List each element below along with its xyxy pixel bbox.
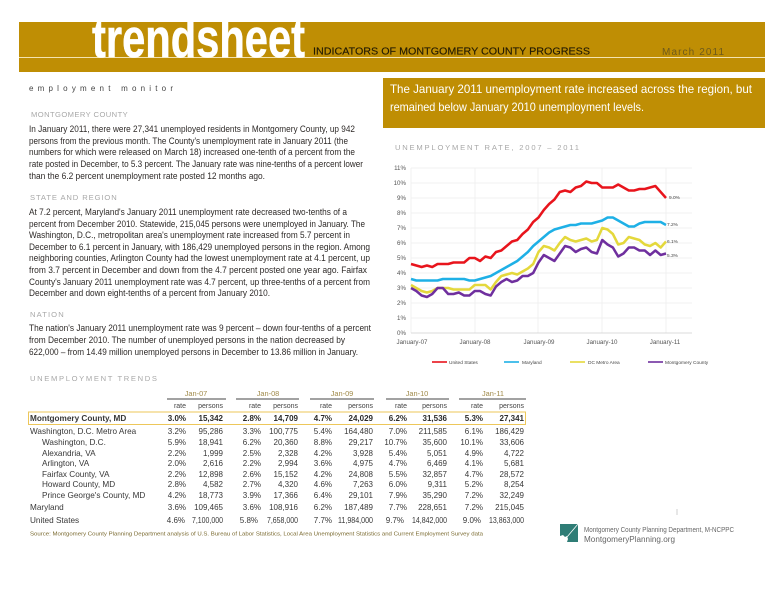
row: Fairfax: 15,152 bbox=[274, 470, 299, 479]
row: Arlington: 5,681 bbox=[504, 459, 525, 468]
row: Fairfax: 5.5% bbox=[389, 470, 407, 479]
row: Maryland: 228,651 bbox=[418, 503, 448, 512]
paragraph: State and Region: from 3.7 percent in December and down from the 4.7 percent posted one year ago. Fairfax bbox=[29, 265, 367, 276]
row: Fairfax: 12,898 bbox=[199, 470, 224, 479]
end value labels: 6.1% bbox=[667, 239, 679, 245]
series: DC Metro Area bbox=[411, 228, 666, 292]
highlighted row: Montgomery County: 27,341 bbox=[500, 414, 525, 423]
row: Arlington: Arlington, VA bbox=[42, 459, 90, 468]
x axis labels: January-08 bbox=[460, 339, 491, 346]
row: Prince George's: 29,101 bbox=[349, 491, 374, 500]
table column headers: rate bbox=[471, 403, 483, 410]
row: Washington metro bbox=[30, 427, 525, 436]
x axis labels: January-10 bbox=[587, 339, 618, 346]
row: United States: United States bbox=[30, 516, 79, 525]
source note: Source: Montgomery County Planning Department analysis of U.S. Bureau of Labor Statistics, Local Area Unemployment Statistics and Current Employment Survey data bbox=[30, 532, 484, 538]
row: Alexandria: 5,051 bbox=[427, 449, 448, 458]
end value labels: 9.0% bbox=[669, 195, 681, 201]
row: Howard: 4.6% bbox=[314, 480, 332, 489]
row: Arlington: 2,994 bbox=[278, 459, 299, 468]
row: United States: 14,842,000 bbox=[412, 516, 447, 525]
row: Maryland: 6.2% bbox=[314, 503, 332, 512]
row: Washington metro: 100,775 bbox=[269, 427, 299, 436]
row: Fairfax: 2.2% bbox=[168, 470, 186, 479]
row: Alexandria: 4.2% bbox=[314, 449, 332, 458]
row: Arlington: 4.1% bbox=[465, 459, 483, 468]
y axis labels: 6% bbox=[397, 240, 406, 247]
row: Washington metro: Washington, D.C. Metro Area bbox=[30, 427, 137, 436]
row: Washington metro: 3.2% bbox=[168, 427, 186, 436]
chart legend: DC Metro Area bbox=[588, 360, 620, 366]
row: Prince George's: 3.9% bbox=[243, 491, 261, 500]
row: Washington metro: 211,585 bbox=[419, 427, 448, 436]
row: Prince George's: 7.9% bbox=[389, 491, 407, 500]
y axis labels: 7% bbox=[397, 225, 406, 232]
paragraph: Nation: 622,000 – from 14.49 million unemployed persons in December to 13.86 million in January. bbox=[29, 347, 358, 358]
row: Fairfax: Fairfax County, VA bbox=[42, 470, 110, 479]
end value labels bbox=[667, 195, 681, 259]
paragraph: Montgomery County: numbers for which were released on March 18) increased one-tenth of a percent from the bbox=[29, 147, 355, 158]
table column headers bbox=[167, 389, 526, 410]
row: United States: 13,863,000 bbox=[489, 516, 524, 525]
text block: Nation bbox=[29, 310, 371, 358]
row: Fairfax: 2.6% bbox=[243, 470, 261, 479]
paragraph: Nation bbox=[29, 323, 371, 358]
row: Alexandria: 2.5% bbox=[243, 449, 261, 458]
paragraph: State and Region: Washington, D.C., metropolitan area's unemployment rate increased from 5.7 percent in bbox=[29, 230, 350, 241]
row: Fairfax: 24,808 bbox=[349, 470, 374, 479]
row: Arlington: 2.2% bbox=[243, 459, 261, 468]
highlighted row: Montgomery County: 5.3% bbox=[465, 414, 483, 423]
paragraph: State and Region: neighboring counties, Arlington County had the lowest unemployment rate at 4.1 percent, up bbox=[29, 253, 370, 264]
row: Howard bbox=[42, 480, 525, 489]
x axis labels bbox=[397, 339, 681, 346]
row: Alexandria bbox=[42, 449, 525, 458]
row: Washington metro: 3.3% bbox=[243, 427, 261, 436]
department name: Montgomery County Planning Department, M-NCPPC bbox=[584, 525, 735, 534]
row: Maryland: 3.6% bbox=[168, 503, 186, 512]
row: Prince George's: 35,290 bbox=[423, 491, 448, 500]
table column headers: Jan-10 bbox=[406, 389, 428, 398]
heading: Nation: NATION bbox=[30, 310, 65, 319]
paragraph: State and Region: percent from December 2010. Statewide, 215,045 persons were unemployed in January. The bbox=[29, 219, 365, 230]
callout: The January 2011 unemployment rate increased across the region, but bbox=[390, 82, 753, 96]
end value labels: 7.2% bbox=[667, 222, 679, 228]
y axis labels: 3% bbox=[397, 285, 406, 292]
paragraph: Montgomery County bbox=[29, 124, 364, 182]
row: Maryland: 108,916 bbox=[269, 503, 299, 512]
logo block bbox=[560, 524, 735, 544]
row: United States: 7,100,000 bbox=[192, 516, 223, 525]
end value labels: 5.3% bbox=[667, 253, 679, 259]
row: Washington DC: Washington, D.C. bbox=[42, 438, 106, 447]
table column headers: rate bbox=[320, 403, 332, 410]
table column headers: persons bbox=[499, 403, 524, 410]
table column headers: Jan-11 bbox=[482, 389, 504, 398]
row: Washington DC: 8.8% bbox=[314, 438, 332, 447]
row: Howard: 7,263 bbox=[353, 480, 374, 489]
highlighted row: Montgomery County: 4.7% bbox=[314, 414, 332, 423]
row: Alexandria: 5.4% bbox=[389, 449, 407, 458]
row: Arlington: 6,469 bbox=[427, 459, 448, 468]
row: Washington metro: 164,480 bbox=[344, 427, 374, 436]
chart title: UNEMPLOYMENT RATE, 2007 – 2011 bbox=[395, 143, 579, 152]
row: Arlington: 4,975 bbox=[353, 459, 374, 468]
paragraph: Montgomery County: persons from the previous month. The County's unemployment rate in January 2011 (the bbox=[29, 136, 348, 147]
row: Washington DC: 20,360 bbox=[274, 438, 299, 447]
row: Maryland bbox=[30, 503, 525, 512]
highlighted row: Montgomery County: 15,342 bbox=[199, 414, 224, 423]
row: Fairfax bbox=[42, 470, 525, 479]
row: United States bbox=[30, 516, 524, 525]
row: Howard: Howard County, MD bbox=[42, 480, 115, 489]
header band bbox=[19, 7, 765, 72]
table: unemployment trends bbox=[28, 389, 526, 525]
table column headers: Jan-07 bbox=[185, 389, 207, 398]
row: Prince George's bbox=[42, 491, 525, 500]
row: United States: 4.6% bbox=[167, 516, 185, 525]
chart legend: Montgomery County bbox=[665, 360, 709, 366]
row: United States: 9.7% bbox=[386, 516, 404, 525]
row: Alexandria: 4,722 bbox=[504, 449, 525, 458]
highlighted row: Montgomery County: Montgomery County, MD bbox=[30, 414, 126, 423]
table title: UNEMPLOYMENT TRENDS bbox=[30, 374, 157, 383]
paragraph: Montgomery County: rate posted in December, to 5.3 percent. The January rate was nine-tenths of a percent lower bbox=[29, 159, 364, 170]
paragraph: State and Region bbox=[29, 207, 370, 299]
y axis labels: 11% bbox=[394, 165, 406, 172]
x axis labels: January-07 bbox=[397, 339, 428, 346]
row: Prince George's: 4.2% bbox=[168, 491, 186, 500]
row: Howard: 8,254 bbox=[504, 480, 525, 489]
paragraph: State and Region: At 7.2 percent, Maryland's January 2011 unemployment rate decreased two-tenths of a bbox=[29, 207, 348, 218]
row: Prince George's: 6.4% bbox=[314, 491, 332, 500]
row: Arlington: 4.7% bbox=[389, 459, 407, 468]
row: Maryland: Maryland bbox=[30, 503, 64, 512]
row: United States: 7,658,000 bbox=[267, 516, 298, 525]
highlighted row: Montgomery County: 14,709 bbox=[274, 414, 299, 423]
y axis labels: 8% bbox=[397, 210, 406, 217]
y axis labels bbox=[394, 165, 406, 337]
row: Howard: 4,582 bbox=[203, 480, 224, 489]
table column headers: persons bbox=[348, 403, 373, 410]
y axis labels: 10% bbox=[394, 180, 406, 187]
row: Arlington: 2.0% bbox=[168, 459, 186, 468]
paragraph: Montgomery County: than the 6.2 percent unemployment rate posted 12 months ago. bbox=[29, 171, 265, 182]
row: Maryland: 7.7% bbox=[389, 503, 407, 512]
row: Maryland: 7.2% bbox=[465, 503, 483, 512]
row: Washington DC: 10.1% bbox=[460, 438, 483, 447]
row: Howard: 2.8% bbox=[168, 480, 186, 489]
x axis labels: January-09 bbox=[524, 339, 555, 346]
subtitle: INDICATORS OF MONTGOMERY COUNTY PROGRESS bbox=[313, 46, 590, 58]
row: United States: 9.0% bbox=[463, 516, 481, 525]
row: Fairfax: 32,857 bbox=[423, 470, 448, 479]
paragraph: Nation: from December 2010. The number of unemployed persons in the nation decreased by bbox=[29, 335, 345, 346]
row: Arlington bbox=[42, 459, 525, 468]
highlighted row: Montgomery County: 6.2% bbox=[389, 414, 407, 423]
row: Alexandria: 3,928 bbox=[353, 449, 374, 458]
paragraph: Montgomery County: In January 2011, there were 27,341 unemployed residents in Montgomery County, up 942 bbox=[29, 124, 355, 135]
row: Prince George's: 18,773 bbox=[199, 491, 224, 500]
heading: State and Region: STATE AND REGION bbox=[30, 193, 118, 202]
paragraph: Nation: The nation's January 2011 unemployment rate was 9 percent – down four-tenths of a percent bbox=[29, 323, 371, 334]
row: Howard: 2.7% bbox=[243, 480, 261, 489]
row: Arlington: 2,616 bbox=[203, 459, 224, 468]
series: United States bbox=[411, 182, 666, 267]
row: Maryland: 3.6% bbox=[243, 503, 261, 512]
table column headers: rate bbox=[174, 403, 186, 410]
row: Fairfax: 28,572 bbox=[500, 470, 525, 479]
row: Maryland: 215,045 bbox=[495, 503, 525, 512]
row: Washington metro: 95,286 bbox=[199, 427, 224, 436]
chart legend bbox=[432, 360, 709, 366]
row: Alexandria: Alexandria, VA bbox=[42, 449, 96, 458]
callout bbox=[383, 78, 765, 128]
title: trendsheet: trendsheet bbox=[92, 7, 305, 69]
row: Howard: 6.0% bbox=[389, 480, 407, 489]
row: Fairfax: 4.7% bbox=[465, 470, 483, 479]
highlighted row: Montgomery County: 24,029 bbox=[349, 414, 374, 423]
table column headers: Jan-09 bbox=[331, 389, 353, 398]
row: United States: 7.7% bbox=[314, 516, 332, 525]
row: Washington DC: 6.2% bbox=[243, 438, 261, 447]
row: Prince George's: 32,249 bbox=[500, 491, 525, 500]
row: Prince George's: 7.2% bbox=[465, 491, 483, 500]
series: Maryland bbox=[411, 218, 666, 280]
highlighted row: Montgomery County: 31,536 bbox=[423, 414, 448, 423]
paragraph: State and Region: December and down eight-tenths of a percent from January 2010. bbox=[29, 288, 270, 299]
row: Washington DC bbox=[42, 438, 525, 447]
y axis labels: 0% bbox=[397, 330, 406, 337]
row: Washington metro: 5.4% bbox=[314, 427, 332, 436]
y axis labels: 1% bbox=[397, 315, 406, 322]
row: Washington DC: 5.9% bbox=[168, 438, 186, 447]
highlighted row: Montgomery County bbox=[28, 412, 526, 424]
row: Washington metro: 186,429 bbox=[495, 427, 525, 436]
row: Washington DC: 10.7% bbox=[384, 438, 407, 447]
highlighted row: Montgomery County: 2.8% bbox=[243, 414, 261, 423]
row: Howard: 4,320 bbox=[278, 480, 299, 489]
text block: Montgomery County bbox=[29, 110, 364, 182]
x axis labels: January-11 bbox=[650, 339, 681, 346]
row: Maryland: 109,465 bbox=[194, 503, 224, 512]
row: Alexandria: 1,999 bbox=[203, 449, 224, 458]
text block: State and Region bbox=[29, 193, 370, 299]
chart legend: Maryland bbox=[522, 360, 542, 366]
table column headers: Jan-08 bbox=[257, 389, 279, 398]
highlighted row: Montgomery County: 3.0% bbox=[168, 414, 186, 423]
y axis labels: 4% bbox=[397, 270, 406, 277]
row: Maryland: 187,489 bbox=[344, 503, 374, 512]
table column headers: persons bbox=[422, 403, 447, 410]
row: Alexandria: 2.2% bbox=[168, 449, 186, 458]
row: Fairfax: 4.2% bbox=[314, 470, 332, 479]
row: Washington DC: 35,600 bbox=[423, 438, 448, 447]
row: United States: 5.8% bbox=[240, 516, 258, 525]
table column headers: rate bbox=[249, 403, 261, 410]
section title: employment monitor: employment monitor bbox=[29, 84, 173, 93]
icon: planning department logo bbox=[560, 524, 578, 542]
y axis labels: 5% bbox=[397, 255, 406, 262]
chart legend: United States bbox=[449, 360, 478, 366]
heading: Montgomery County: MONTGOMERY COUNTY bbox=[31, 110, 129, 119]
row: Prince George's: Prince George's County, MD bbox=[42, 491, 145, 500]
row: Washington DC: 33,606 bbox=[500, 438, 525, 447]
series: Montgomery County bbox=[411, 240, 666, 297]
paragraph: State and Region: December to 6.1 percent in January, with 186,429 unemployed persons in the region. Among bbox=[29, 242, 370, 253]
row: United States: 11,984,000 bbox=[338, 516, 373, 525]
date: March 2011 bbox=[662, 47, 724, 58]
table column headers: persons bbox=[198, 403, 223, 410]
row: Washington DC: 18,941 bbox=[199, 438, 224, 447]
row: Washington metro: 6.1% bbox=[465, 427, 483, 436]
y axis labels: 2% bbox=[397, 300, 406, 307]
row: Arlington: 3.6% bbox=[314, 459, 332, 468]
table column headers: persons bbox=[273, 403, 298, 410]
website: MontgomeryPlanning.org bbox=[584, 535, 675, 544]
row: Alexandria: 4.9% bbox=[465, 449, 483, 458]
row: Washington DC: 29,217 bbox=[349, 438, 374, 447]
row: Alexandria: 2,328 bbox=[278, 449, 299, 458]
table column headers: rate bbox=[395, 403, 407, 410]
paragraph: State and Region: County's January 2011 unemployment rate was 4.7 percent, up three-tenths of a percent from bbox=[29, 277, 370, 288]
row: Howard: 5.2% bbox=[465, 480, 483, 489]
row: Howard: 9,311 bbox=[428, 480, 448, 489]
row: Washington metro: 7.0% bbox=[389, 427, 407, 436]
callout: remained below January 2010 unemployment levels. bbox=[390, 100, 644, 114]
line chart: unemployment rate bbox=[394, 165, 692, 346]
y axis labels: 9% bbox=[397, 195, 406, 202]
row: Prince George's: 17,366 bbox=[274, 491, 299, 500]
